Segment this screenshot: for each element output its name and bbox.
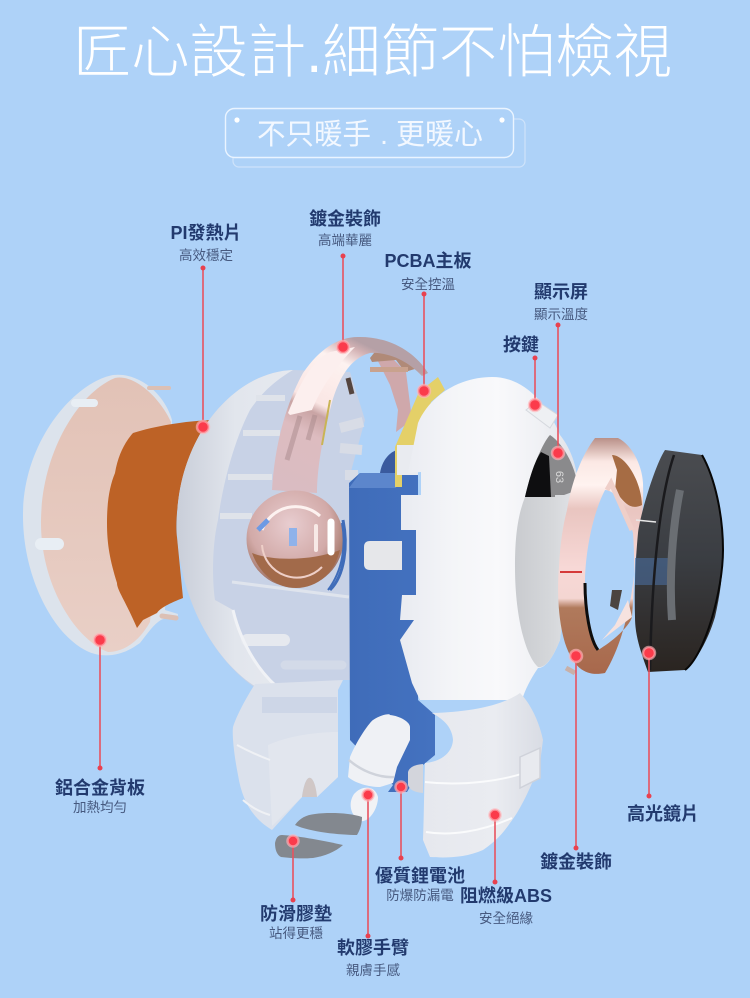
callout: PCBA board <box>384 251 472 397</box>
callout: button: 按鍵 <box>503 334 539 355</box>
callout: lithium battery: 優質鋰電池 <box>375 865 465 886</box>
callout: flame-retardant ABS: 安全絕緣 <box>479 911 533 926</box>
callout: soft arm <box>337 790 409 978</box>
lithium battery <box>330 450 435 792</box>
callout: display: 顯示溫度 <box>534 307 588 322</box>
subtitle badge <box>226 108 525 167</box>
right white shell <box>397 377 578 700</box>
left lower body <box>233 680 343 830</box>
exploded product illustration <box>23 337 723 858</box>
gold front ring <box>558 438 643 674</box>
callout: flame-retardant ABS: 阻燃級ABS <box>460 885 552 906</box>
callout: aluminium back plate <box>55 634 145 815</box>
callout: glossy lens: 高光鏡片 <box>627 803 699 824</box>
callout: PCBA board: PCBA主板 <box>384 251 472 271</box>
callout: PI heating film <box>170 223 242 433</box>
soft arm <box>348 714 410 821</box>
callout: anti-slip pad: 站得更穩 <box>269 925 323 941</box>
callout: flame-retardant ABS <box>460 810 552 926</box>
display screen <box>525 435 578 497</box>
callout: display <box>534 282 588 459</box>
callout: gold trim <box>309 208 381 353</box>
callout: display: 顯示屏 <box>534 282 588 302</box>
callout: gold trim: 高端華麗 <box>318 232 372 248</box>
callout: PI heating film: PI發熱片 <box>170 223 242 243</box>
callout: anti-slip pad: 防滑膠墊 <box>260 903 332 924</box>
button <box>526 401 558 428</box>
callout: gold ring <box>540 650 612 872</box>
subtitle badge: . <box>380 119 388 151</box>
title: 匠心設計.細節不怕檢視 <box>73 20 672 85</box>
callout: gold trim: 鍍金裝飾 <box>309 208 381 229</box>
display screen: 63 <box>553 471 565 483</box>
callout: soft arm: 軟膠手臂 <box>337 937 409 958</box>
gold ring band <box>272 337 428 493</box>
right lower body <box>408 693 543 857</box>
aluminium back plate <box>23 375 178 655</box>
subtitle badge: 更暖心 <box>396 118 483 151</box>
callout: anti-slip pad <box>260 836 332 941</box>
callout: aluminium back plate: 鋁合金背板 <box>55 777 145 798</box>
callout: lithium battery: 防爆防漏電 <box>386 888 454 903</box>
anti-slip pads <box>275 813 362 858</box>
callout: glossy lens <box>627 647 699 824</box>
callout: aluminium back plate: 加熱均勻 <box>73 800 127 815</box>
callout: PI heating film: 高效穩定 <box>179 247 233 263</box>
left shell <box>177 370 365 697</box>
callout: soft arm: 親膚手感 <box>346 962 400 978</box>
callout: gold ring: 鍍金裝飾 <box>540 851 612 872</box>
callout: button <box>503 334 541 411</box>
chrome ball <box>246 490 344 590</box>
glossy lens <box>635 450 723 672</box>
shell face opening <box>515 435 578 667</box>
callout: lithium battery <box>375 782 465 903</box>
PCBA yellow board <box>395 377 445 487</box>
callout: PCBA board: 安全控溫 <box>401 277 455 292</box>
PI heating film <box>107 420 212 628</box>
subtitle badge: 不只暖手 <box>257 118 371 151</box>
